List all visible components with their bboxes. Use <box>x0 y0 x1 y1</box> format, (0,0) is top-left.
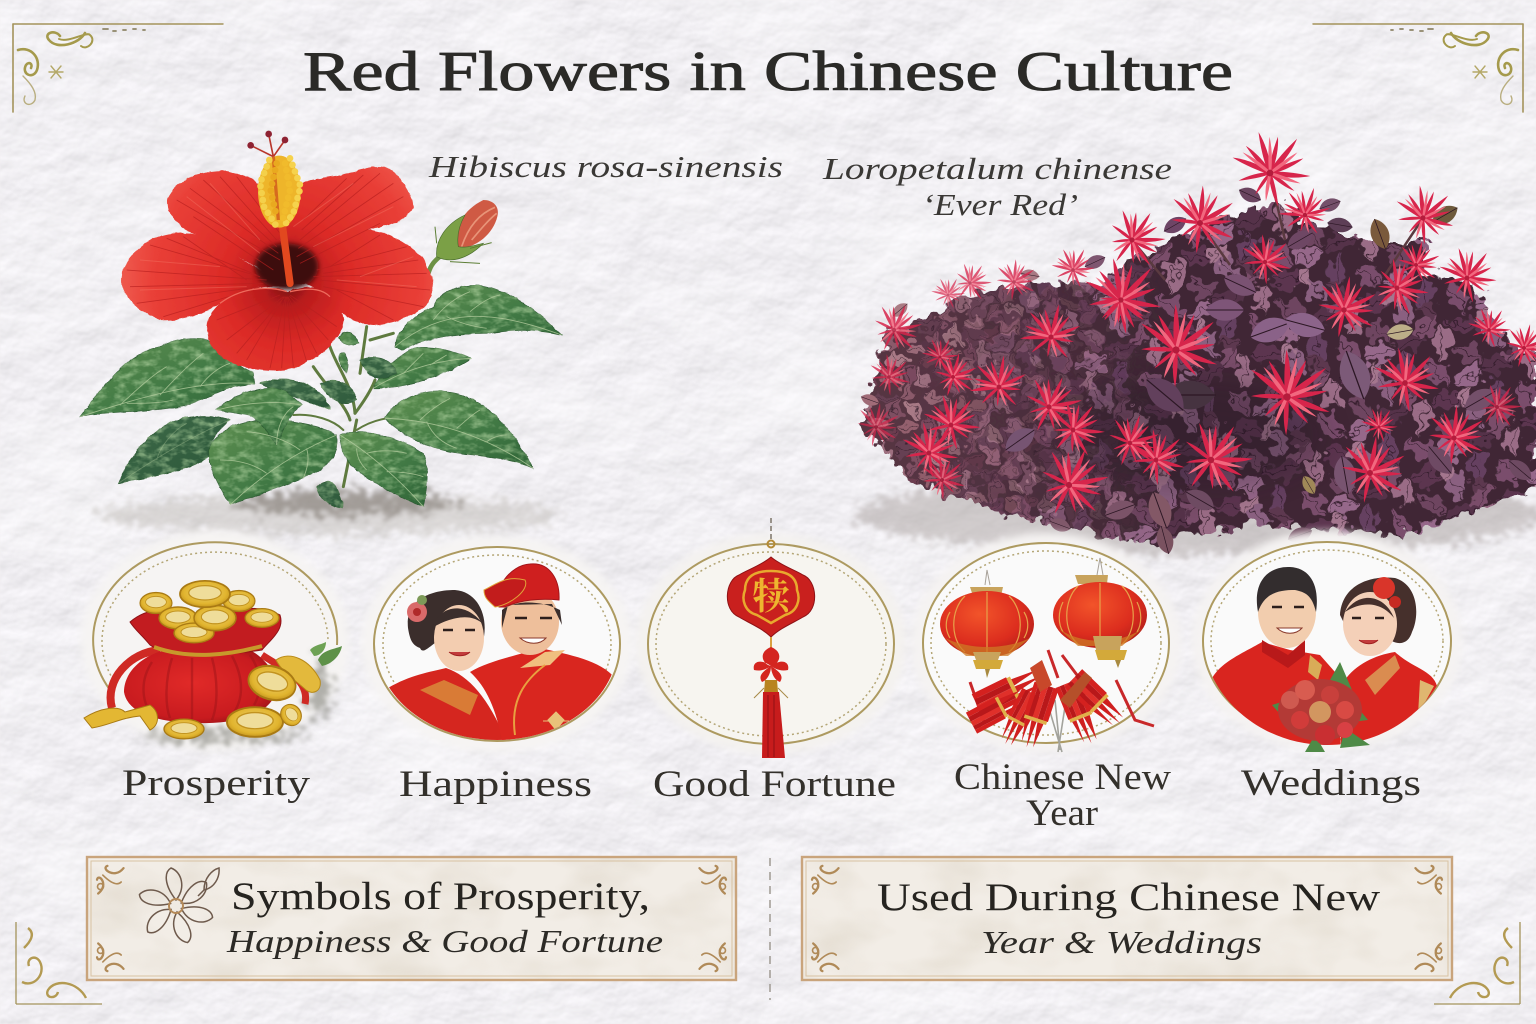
groom head <box>1257 567 1317 648</box>
hibiscus dark throat <box>255 243 318 290</box>
label: happiness: Happiness <box>399 764 592 805</box>
hibiscus bud <box>428 200 498 273</box>
panel text: Used During Chinese New <box>877 876 1380 919</box>
corner ornament: bottom left <box>16 922 102 1004</box>
panel: symbols of prosperity <box>87 857 736 980</box>
label: chinese new year: Year <box>1026 793 1098 834</box>
species label: hibiscus: Hibiscus rosa-sinensis <box>428 149 783 184</box>
corner ornament: top left <box>13 24 223 112</box>
bouquet <box>1272 662 1370 752</box>
illustration: hibiscus plant <box>80 131 565 535</box>
medallion: good fortune <box>636 518 906 758</box>
hibiscus stems <box>293 327 393 487</box>
label: good fortune: Good Fortune <box>653 764 896 805</box>
medallion: prosperity <box>81 531 349 751</box>
hibiscus leaves <box>80 285 562 508</box>
hibiscus ground shadow <box>95 489 565 535</box>
corner ornament: bottom right <box>1434 922 1520 1004</box>
icon: left red lantern <box>940 570 1034 678</box>
corner ornament: top right <box>1313 24 1523 112</box>
panel text <box>226 875 663 959</box>
species label: loropetalum: ‘Ever Red’ <box>922 187 1078 222</box>
bush foliage mass <box>860 205 1536 545</box>
bush ground shadow <box>855 475 1536 555</box>
hibiscus stamen <box>247 131 301 283</box>
panel: used during chinese new year <box>802 857 1452 980</box>
icon: hanging red knot ornament <box>727 518 815 758</box>
icon: ground scatter under bag <box>140 662 331 742</box>
panel text: Happiness & Good Fortune <box>226 923 663 959</box>
medallion: weddings <box>1192 531 1462 752</box>
illustration: loropetalum bush <box>846 127 1536 556</box>
bush dark core <box>1055 380 1325 490</box>
panel text: Year & Weddings <box>981 924 1262 960</box>
bush sprig stems <box>1132 173 1423 280</box>
hibiscus bottom petal <box>207 287 343 370</box>
bride head <box>1340 577 1416 656</box>
icon: outlined flower <box>137 868 219 944</box>
icon: hanging red knot ornament: 犊 <box>752 566 792 620</box>
panel text: Symbols of Prosperity, <box>231 875 650 918</box>
bush feature leaves <box>859 184 1536 556</box>
medallion: happiness <box>362 536 632 760</box>
icon: red money bag with coins <box>84 581 342 739</box>
panel text <box>877 876 1380 960</box>
label: weddings: Weddings <box>1241 763 1421 804</box>
title: Red Flowers in Chinese Culture <box>303 41 1233 103</box>
icon: right red lantern <box>1053 558 1147 668</box>
bush red flowers <box>846 127 1536 533</box>
hibiscus veins upper <box>127 173 430 320</box>
label: chinese new year: Chinese New <box>954 757 1171 798</box>
hibiscus leaf veins <box>80 292 562 507</box>
hibiscus petals <box>122 167 433 325</box>
icon: firecracker bundles <box>966 650 1154 752</box>
medallion: chinese new year <box>911 533 1181 753</box>
illustration: wedding couple with bouquet <box>1208 567 1438 752</box>
label: chinese new year <box>954 757 1171 834</box>
species label: loropetalum: Loropetalum chinense <box>822 151 1172 186</box>
center dashed divider <box>769 858 771 1000</box>
illustration: smiling couple in red <box>389 563 612 740</box>
species label: loropetalum <box>822 151 1172 222</box>
label: prosperity: Prosperity <box>122 763 311 804</box>
